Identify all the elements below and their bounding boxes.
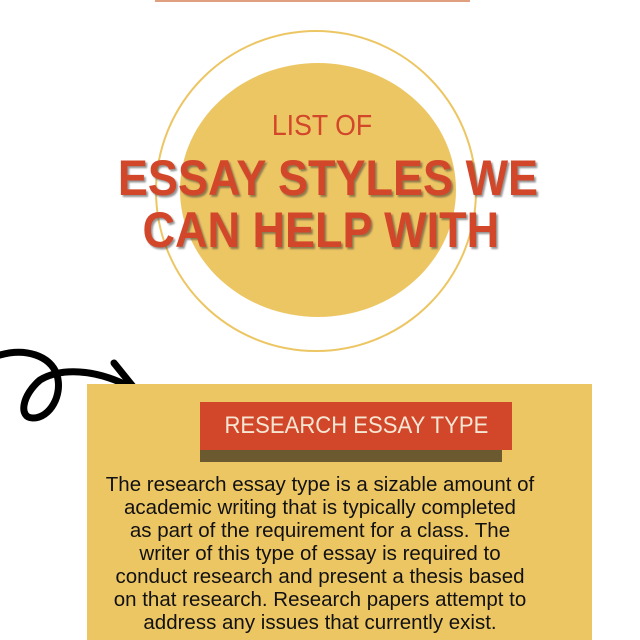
body text: The research essay type is a sizable amount of	[106, 473, 534, 496]
main title: CAN HELP WITH	[142, 202, 499, 258]
label: research essay type: RESEARCH ESSAY TYPE	[224, 412, 488, 439]
subtitle: list of: LIST OF	[272, 110, 372, 142]
label shadow	[200, 415, 502, 462]
body text	[106, 473, 534, 634]
top bar	[155, 0, 470, 2]
panel: research essay type	[87, 384, 592, 640]
body text: academic writing that is typically completed	[124, 496, 516, 519]
icon: curly arrow	[0, 348, 136, 422]
body text: address any issues that currently exist.	[143, 611, 497, 634]
body text: conduct research and present a thesis based	[115, 565, 525, 588]
body text: as part of the requirement for a class. The	[130, 519, 510, 542]
title	[118, 110, 540, 258]
body text: on that research. Research papers attempt to	[114, 588, 526, 611]
main title	[118, 150, 540, 258]
main title: ESSAY STYLES WE	[118, 150, 538, 206]
body text: writer of this type of essay is required to	[139, 542, 501, 565]
label: research essay type	[200, 402, 512, 450]
